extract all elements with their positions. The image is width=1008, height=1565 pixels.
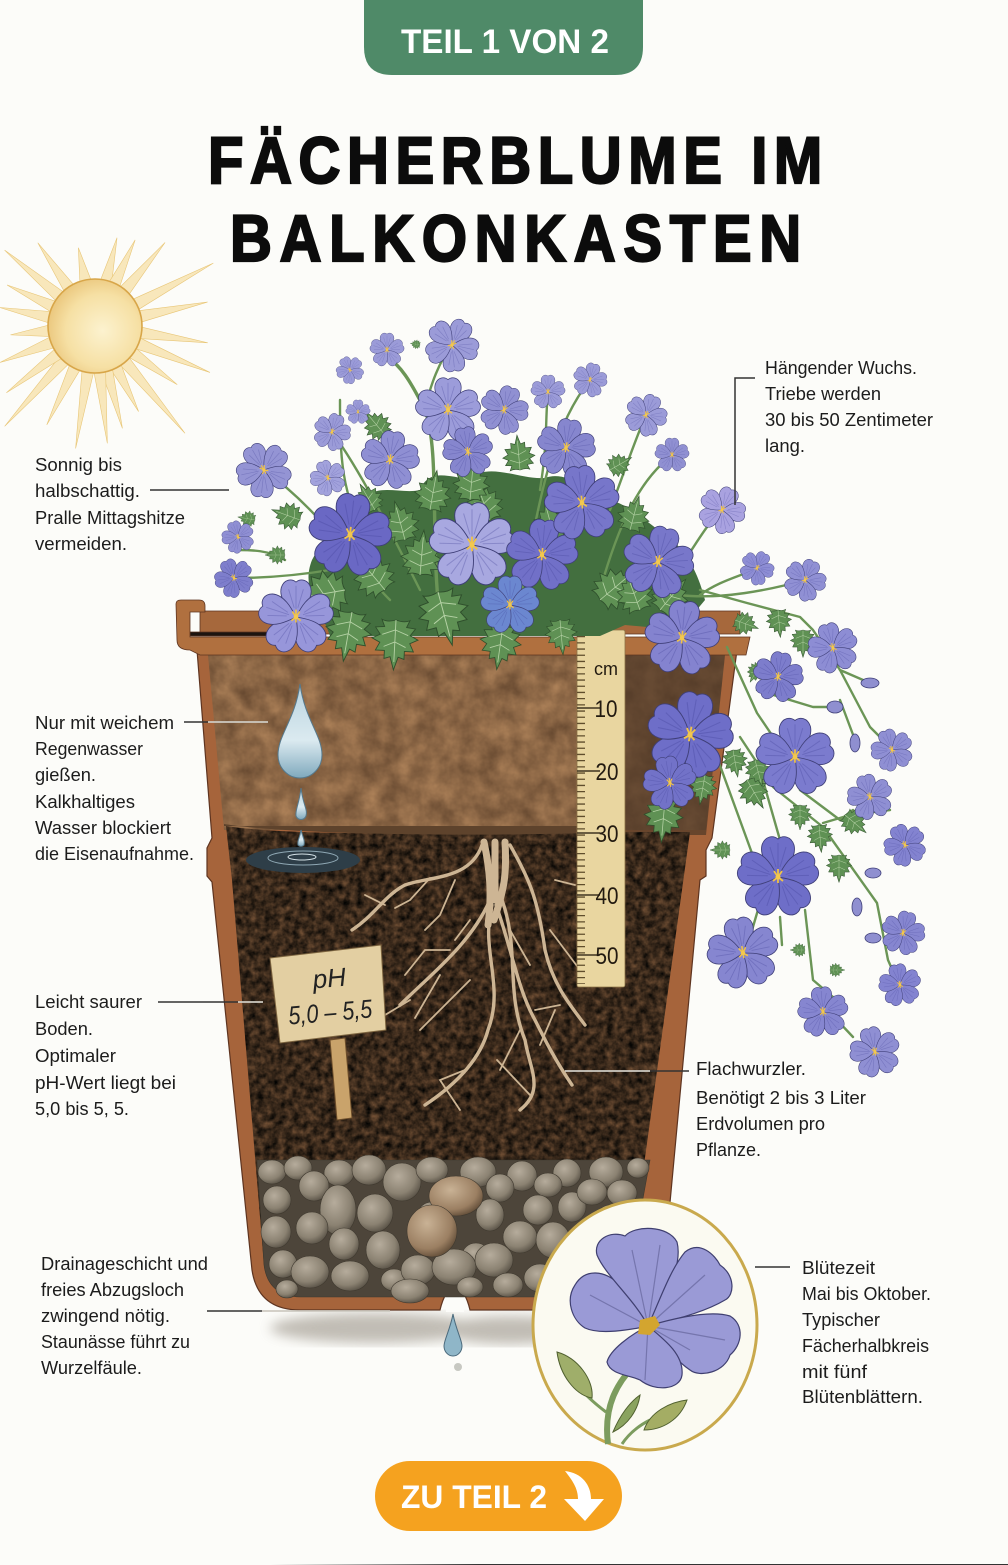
icon: arrow	[564, 1471, 604, 1521]
title	[208, 125, 822, 276]
title: BALKONKASTEN	[230, 203, 801, 276]
label: water: Nur mit weichem	[35, 712, 174, 733]
title: FÄCHERBLUME IM	[208, 125, 822, 198]
label: roots	[696, 1058, 866, 1160]
button: to part 2: ZU TEIL 2	[401, 1479, 547, 1515]
ruler: 10	[594, 696, 618, 723]
pot back wall	[208, 655, 725, 830]
pot shadow	[270, 1313, 580, 1344]
planter cross-section	[35, 308, 935, 1531]
pot shell	[197, 650, 737, 1310]
label: soil: Boden.	[35, 1018, 93, 1039]
label: water: gießen.	[35, 764, 96, 785]
icon: water drop	[278, 684, 322, 846]
label: sun	[35, 454, 185, 554]
flower buds	[827, 678, 881, 943]
ruler	[577, 630, 625, 987]
label: soil	[35, 991, 176, 1119]
ruler: 50	[596, 943, 618, 970]
label: water	[35, 712, 194, 864]
label: flowering: Blütezeit	[802, 1257, 875, 1278]
stems	[234, 345, 900, 1037]
drain water drop	[444, 1300, 462, 1371]
flower stem and buds	[557, 1352, 687, 1444]
label: drainage: Drainageschicht und	[41, 1253, 208, 1274]
label: growth: Hängender Wuchs.	[765, 357, 917, 378]
label: water: Kalkhaltiges	[35, 791, 135, 812]
label: flowering: Blütenblättern.	[802, 1386, 923, 1407]
label: drainage: Wurzelfäule.	[41, 1357, 142, 1378]
label: roots: Pflanze.	[696, 1139, 761, 1160]
badge: part 1 of 2: TEIL 1 VON 2	[401, 23, 609, 61]
badge: part 1 of 2	[364, 0, 643, 75]
ruler: 40	[596, 883, 618, 910]
label: soil: Optimaler	[35, 1045, 116, 1066]
label: growth: lang.	[765, 435, 805, 456]
label: growth: Triebe werden	[765, 383, 881, 404]
label: soil: pH-Wert liegt bei	[35, 1072, 176, 1093]
label: flowering: mit fünf	[802, 1361, 868, 1382]
icon: sun	[0, 236, 216, 449]
label: sun: vermeiden.	[35, 533, 127, 554]
label: sun: Pralle Mittagshitze	[35, 507, 185, 528]
flower petals	[570, 1228, 740, 1388]
label: flowering: Mai bis Oktober.	[802, 1283, 931, 1304]
puddle	[246, 847, 360, 873]
blossoms	[207, 308, 935, 1084]
drainage pebbles	[257, 1155, 650, 1303]
leaves	[236, 339, 874, 977]
label: drainage: zwingend nötig.	[41, 1305, 170, 1326]
label: flowering: Fächerhalbkreis	[802, 1335, 929, 1356]
pH sign: 5,0 – 5,5	[287, 993, 374, 1031]
plant	[207, 308, 935, 1084]
label: drainage: Staunässe führt zu	[41, 1331, 190, 1352]
label: water: die Eisenaufnahme.	[35, 843, 194, 864]
label: soil: 5,0 bis 5, 5.	[35, 1098, 129, 1119]
inset: flower detail	[533, 1200, 757, 1450]
label: soil: Leicht saurer	[35, 991, 142, 1012]
label: flowering	[802, 1257, 931, 1407]
label: flowering: Typischer	[802, 1309, 880, 1330]
button: to part 2	[375, 1461, 622, 1531]
label: water: Regenwasser	[35, 738, 143, 759]
label: growth	[765, 357, 933, 456]
label: water: Wasser blockiert	[35, 817, 171, 838]
label: sun: halbschattig.	[35, 480, 140, 501]
pH sign: pH	[310, 962, 347, 995]
pH sign	[270, 945, 386, 1120]
label: roots: Erdvolumen pro	[696, 1113, 825, 1134]
label: roots: Benötigt 2 bis 3 Liter	[696, 1087, 866, 1108]
label: growth: 30 bis 50 Zentimeter	[765, 409, 933, 430]
soil	[226, 826, 690, 1297]
label: roots: Flachwurzler.	[696, 1058, 806, 1079]
label: sun: Sonnig bis	[35, 454, 122, 475]
ruler: 30	[596, 821, 618, 848]
label: drainage	[41, 1253, 208, 1378]
foliage mass	[308, 471, 705, 636]
label: drainage: freies Abzugsloch	[41, 1279, 184, 1300]
ruler: cm	[594, 659, 618, 679]
leader lines	[150, 378, 790, 1311]
roots	[352, 842, 585, 1110]
ruler: 20	[596, 759, 618, 786]
pot rim	[176, 600, 750, 655]
